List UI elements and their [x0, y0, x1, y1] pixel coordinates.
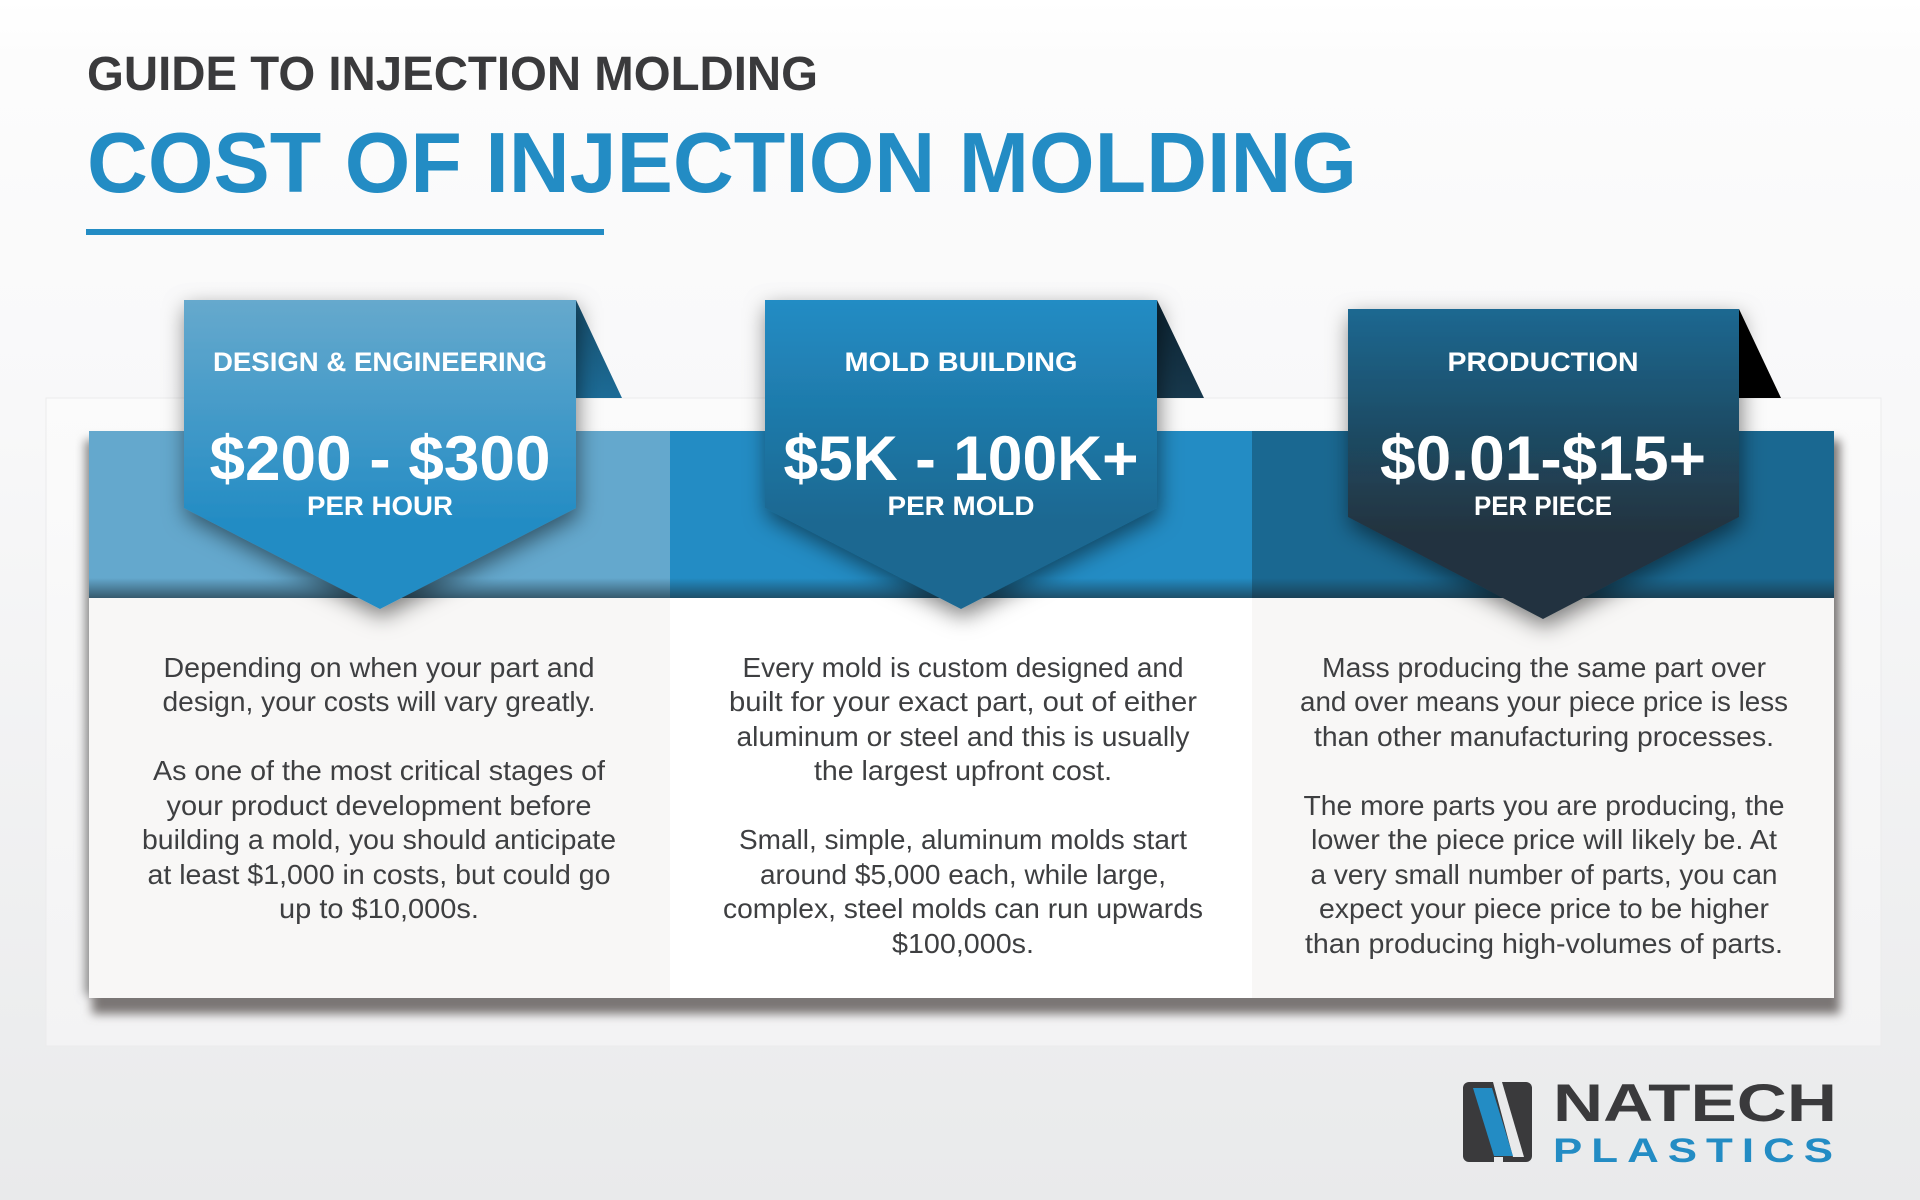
- ribbon label: DESIGN & ENGINEERING: [213, 347, 547, 377]
- ribbon fold: [1157, 300, 1204, 398]
- text block: production: than other manufacturing processes.: [1314, 721, 1774, 752]
- price: $0.01-$15+: [1380, 424, 1706, 494]
- price: $200 - $300: [210, 424, 550, 494]
- text block: mold building: Every mold is custom designed and: [742, 652, 1184, 683]
- price unit: PER MOLD: [888, 491, 1034, 521]
- kicker heading: GUIDE TO INJECTION MOLDING: [87, 48, 818, 101]
- text block: mold building: the largest upfront cost.: [814, 755, 1112, 786]
- text block: production: lower the piece price will likely be. At: [1311, 824, 1777, 855]
- ribbon fold: [1739, 309, 1781, 398]
- text block: design and engineering: at least $1,000 in costs, but could go: [148, 859, 610, 890]
- text block: production: and over means your piece price is less: [1300, 686, 1788, 717]
- title block: [86, 48, 1357, 235]
- price unit: PER PIECE: [1474, 491, 1612, 521]
- logo: Natech Plastics: [1463, 1074, 1842, 1170]
- logo wordmark top: NATECH: [1553, 1074, 1837, 1133]
- panel: mold building background: [670, 598, 1252, 998]
- text block: production: expect your piece price to be higher: [1319, 893, 1769, 924]
- panel: design and engineering background: [89, 598, 670, 998]
- text block: design and engineering: [142, 652, 616, 924]
- text block: design and engineering: up to $10,000s.: [279, 893, 479, 924]
- ribbon: mold building: [765, 300, 1204, 609]
- text block: mold building: [723, 652, 1203, 959]
- text block: design and engineering: building a mold, you should anticipate: [142, 824, 616, 855]
- outer light panel: [46, 398, 1881, 1046]
- ribbon body: [765, 300, 1157, 609]
- price: $5K - 100K+: [784, 424, 1138, 494]
- ribbon: production: [1348, 309, 1781, 619]
- text block: design and engineering: As one of the most critical stages of: [153, 755, 605, 786]
- panel shadow: [85, 440, 1840, 1014]
- ribbon label: MOLD BUILDING: [844, 347, 1078, 377]
- text block: mold building: complex, steel molds can run upwards: [723, 893, 1203, 924]
- ribbon label: PRODUCTION: [1448, 347, 1638, 377]
- main heading: COST OF INJECTION MOLDING: [87, 116, 1357, 211]
- text block: production: than producing high-volumes of parts.: [1305, 928, 1783, 959]
- panel: production background: [1252, 598, 1834, 998]
- text block: mold building: $100,000s.: [892, 928, 1034, 959]
- text block: production: a very small number of parts, you can: [1310, 859, 1778, 890]
- text block: mold building: built for your exact part, out of either: [729, 686, 1197, 717]
- logo wordmark bottom: PLASTICS: [1553, 1132, 1842, 1170]
- ribbon: design and engineering: [184, 300, 622, 609]
- text block: design and engineering: Depending on when your part and: [164, 652, 594, 683]
- icon: logo mark: [1463, 1082, 1532, 1162]
- heading underline: [86, 229, 604, 235]
- colored band: three price sections: [89, 431, 1834, 598]
- text block: production: Mass producing the same part over: [1322, 652, 1766, 683]
- text block: mold building: aluminum or steel and this is usually: [736, 721, 1190, 752]
- text block: mold building: Small, simple, aluminum molds start: [739, 824, 1187, 855]
- text block: mold building: around $5,000 each, while large,: [760, 859, 1166, 890]
- text block: production: The more parts you are producing, the: [1304, 790, 1784, 821]
- ribbon body: [184, 300, 576, 609]
- price unit: PER HOUR: [307, 491, 453, 521]
- ribbon body: [1348, 309, 1739, 619]
- text block: design and engineering: your product development before: [166, 790, 592, 821]
- text block: production: [1300, 652, 1788, 959]
- text block: design and engineering: design, your costs will vary greatly.: [162, 686, 596, 717]
- ribbon fold: [576, 300, 622, 398]
